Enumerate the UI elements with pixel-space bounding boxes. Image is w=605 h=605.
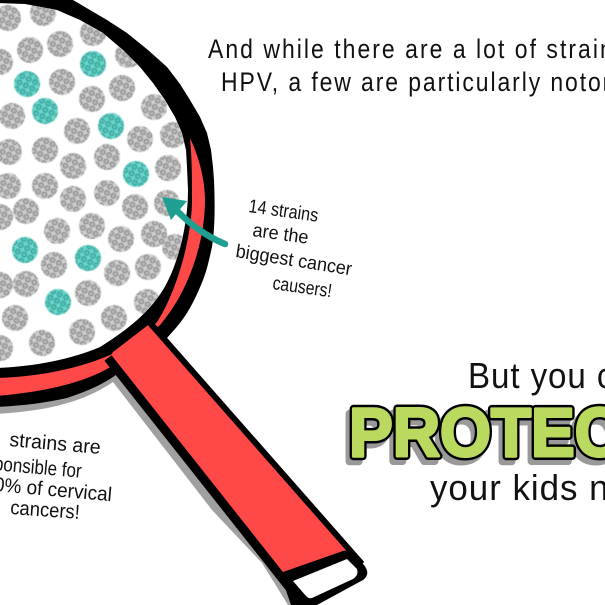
lens interior bbox=[0, 3, 188, 368]
callout: 14 strains: causers! bbox=[271, 272, 333, 302]
white handle cap bbox=[293, 559, 358, 598]
grey strains bbox=[0, 0, 188, 361]
callout: cervical cancers bbox=[0, 429, 113, 524]
callout: 14 strains: are the bbox=[251, 219, 310, 248]
magnifying glass bbox=[0, 0, 367, 605]
callout: cervical cancers: strains are bbox=[9, 429, 102, 459]
handle left outline bbox=[108, 358, 293, 592]
handle bbox=[108, 322, 367, 605]
heading: protect message bbox=[345, 357, 605, 508]
handle tip bbox=[280, 550, 367, 605]
heading: intro text bbox=[208, 34, 605, 97]
arrow: teal pointer bbox=[162, 197, 225, 244]
callout: 14 strains bbox=[234, 195, 354, 302]
callout: 14 strains: biggest cancer bbox=[234, 240, 354, 279]
callout: cervical cancers: cancers! bbox=[10, 497, 80, 524]
virus particles bbox=[0, 0, 188, 361]
red handle body bbox=[108, 322, 349, 574]
handle right outline bbox=[150, 323, 362, 564]
cancer-causing strains bbox=[12, 51, 149, 315]
lens frame bbox=[0, 0, 215, 407]
callout: 14 strains: 14 strains bbox=[247, 195, 320, 226]
handle shadow bbox=[0, 360, 305, 605]
red frame band bbox=[0, 138, 205, 396]
